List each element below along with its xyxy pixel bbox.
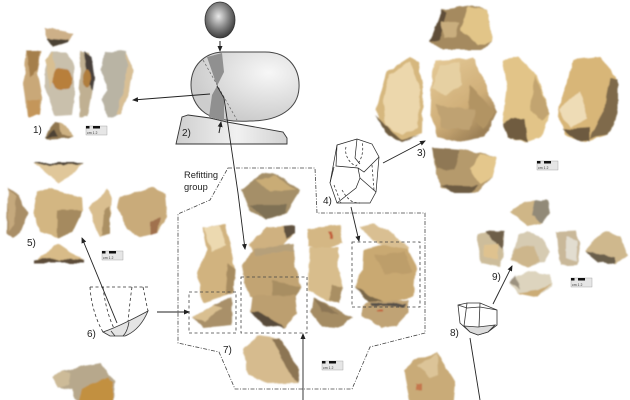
flake 9 bottom xyxy=(509,271,551,297)
flake 5 top xyxy=(34,163,83,183)
box: dashed selection B xyxy=(241,277,307,333)
label 9: 9) xyxy=(492,272,501,283)
scale bar 9: cm 1 2 xyxy=(572,283,583,287)
scale bar 5: cm 1 2 xyxy=(103,256,114,260)
refit column 2 upper flake xyxy=(249,225,295,254)
refit column 1 lower xyxy=(193,297,232,328)
refit column 2 main xyxy=(242,243,302,297)
refit column 4 lower xyxy=(362,300,408,328)
refit column 3 top xyxy=(308,225,343,249)
flake 5 bottom xyxy=(34,243,83,263)
arrow: percussion down xyxy=(219,41,221,51)
arrow: 6 to refit xyxy=(157,311,189,313)
panel: group 1 flake views xyxy=(24,28,133,139)
flake 9 narrow xyxy=(556,231,581,266)
flake 1 top view xyxy=(44,28,74,47)
flake 9 left xyxy=(478,231,504,267)
rock: bottom left core xyxy=(53,363,115,400)
flake 5 side xyxy=(89,188,112,237)
core back view xyxy=(557,57,618,142)
panel: anvil and cobble diagram xyxy=(176,52,299,144)
panel: group 3 core views xyxy=(376,5,618,193)
split flake shaded bands xyxy=(203,53,237,121)
diagram 6: dashed core with flake xyxy=(90,287,148,336)
flake 9 right xyxy=(586,231,628,265)
flake 1 right side xyxy=(79,51,95,117)
arrow: to flake 1 xyxy=(133,94,210,100)
line: 8 downwards xyxy=(470,338,480,400)
rock: bottom right core xyxy=(404,353,455,400)
box: dashed selection C xyxy=(352,242,420,307)
core top view xyxy=(430,5,492,50)
scale bar 7 xyxy=(322,361,343,370)
refit column 3 middle xyxy=(308,247,343,303)
label 2: 2) xyxy=(182,128,191,139)
flake 1 back xyxy=(101,50,133,117)
label 7: 7) xyxy=(223,345,232,356)
arrow: 4 to 3 xyxy=(383,141,425,163)
arrow: anvil counter-force xyxy=(219,122,221,133)
anvil xyxy=(176,115,287,144)
refit column 2 lower xyxy=(250,295,297,328)
label 5: 5) xyxy=(27,238,36,249)
scale bar 5 xyxy=(102,251,123,260)
flake 9 center xyxy=(510,231,551,267)
panel: refitting group outline xyxy=(178,168,425,389)
box: dashed selection A xyxy=(189,292,236,333)
refit column 4 upper flake xyxy=(360,224,409,253)
panel: group 9 flake views xyxy=(478,200,628,297)
scale bar 1: cm 1 2 xyxy=(87,131,98,135)
scale bar 1 xyxy=(86,126,107,135)
refit bottom rock xyxy=(243,335,300,383)
label 8: 8) xyxy=(450,328,459,339)
heading: refitting group: Refitting xyxy=(184,170,218,180)
icon: hammer stone sphere xyxy=(205,2,235,38)
arrow: from below to box B xyxy=(302,334,304,400)
refit column 4 main xyxy=(355,245,416,303)
core left view xyxy=(376,57,423,142)
core side view xyxy=(503,57,550,142)
flake 5 left xyxy=(7,188,28,238)
arrow: cobble to refitting group xyxy=(217,86,245,249)
refit column 3 lower xyxy=(310,298,353,328)
flake 1 bottom view xyxy=(45,122,74,139)
diagram 8: core with flake xyxy=(458,303,497,335)
panel: refitted rocks xyxy=(193,173,416,383)
flake 5 back xyxy=(117,187,167,237)
scale bar 7: cm 1 2 xyxy=(323,366,334,370)
refit top rock xyxy=(242,173,300,220)
label 4: 4) xyxy=(323,196,332,207)
panel: group 5 flake views xyxy=(7,163,167,263)
flake 5 front xyxy=(34,188,83,237)
scale bar 3 xyxy=(537,161,558,170)
cobble xyxy=(191,52,299,121)
core bottom view xyxy=(432,148,497,193)
core front view xyxy=(430,58,497,142)
arrow: 8 to 9 xyxy=(493,266,512,304)
label 1: 1) xyxy=(33,125,42,136)
arrow: 4 to refit xyxy=(351,207,359,241)
label 6: 6) xyxy=(87,329,96,340)
flake 1 left side xyxy=(24,51,42,117)
flake 9 top xyxy=(510,200,550,226)
diagram 4: core scar line drawing xyxy=(330,139,379,203)
scale bar 9 xyxy=(571,278,592,287)
heading: refitting group: group xyxy=(184,182,208,192)
scale bar 3: cm 1 2 xyxy=(538,166,549,170)
label 3: 3) xyxy=(417,148,426,159)
refit column 1 upper xyxy=(197,224,235,303)
flake 1 front xyxy=(45,52,74,116)
arrow: 6 to 5 xyxy=(82,238,117,323)
